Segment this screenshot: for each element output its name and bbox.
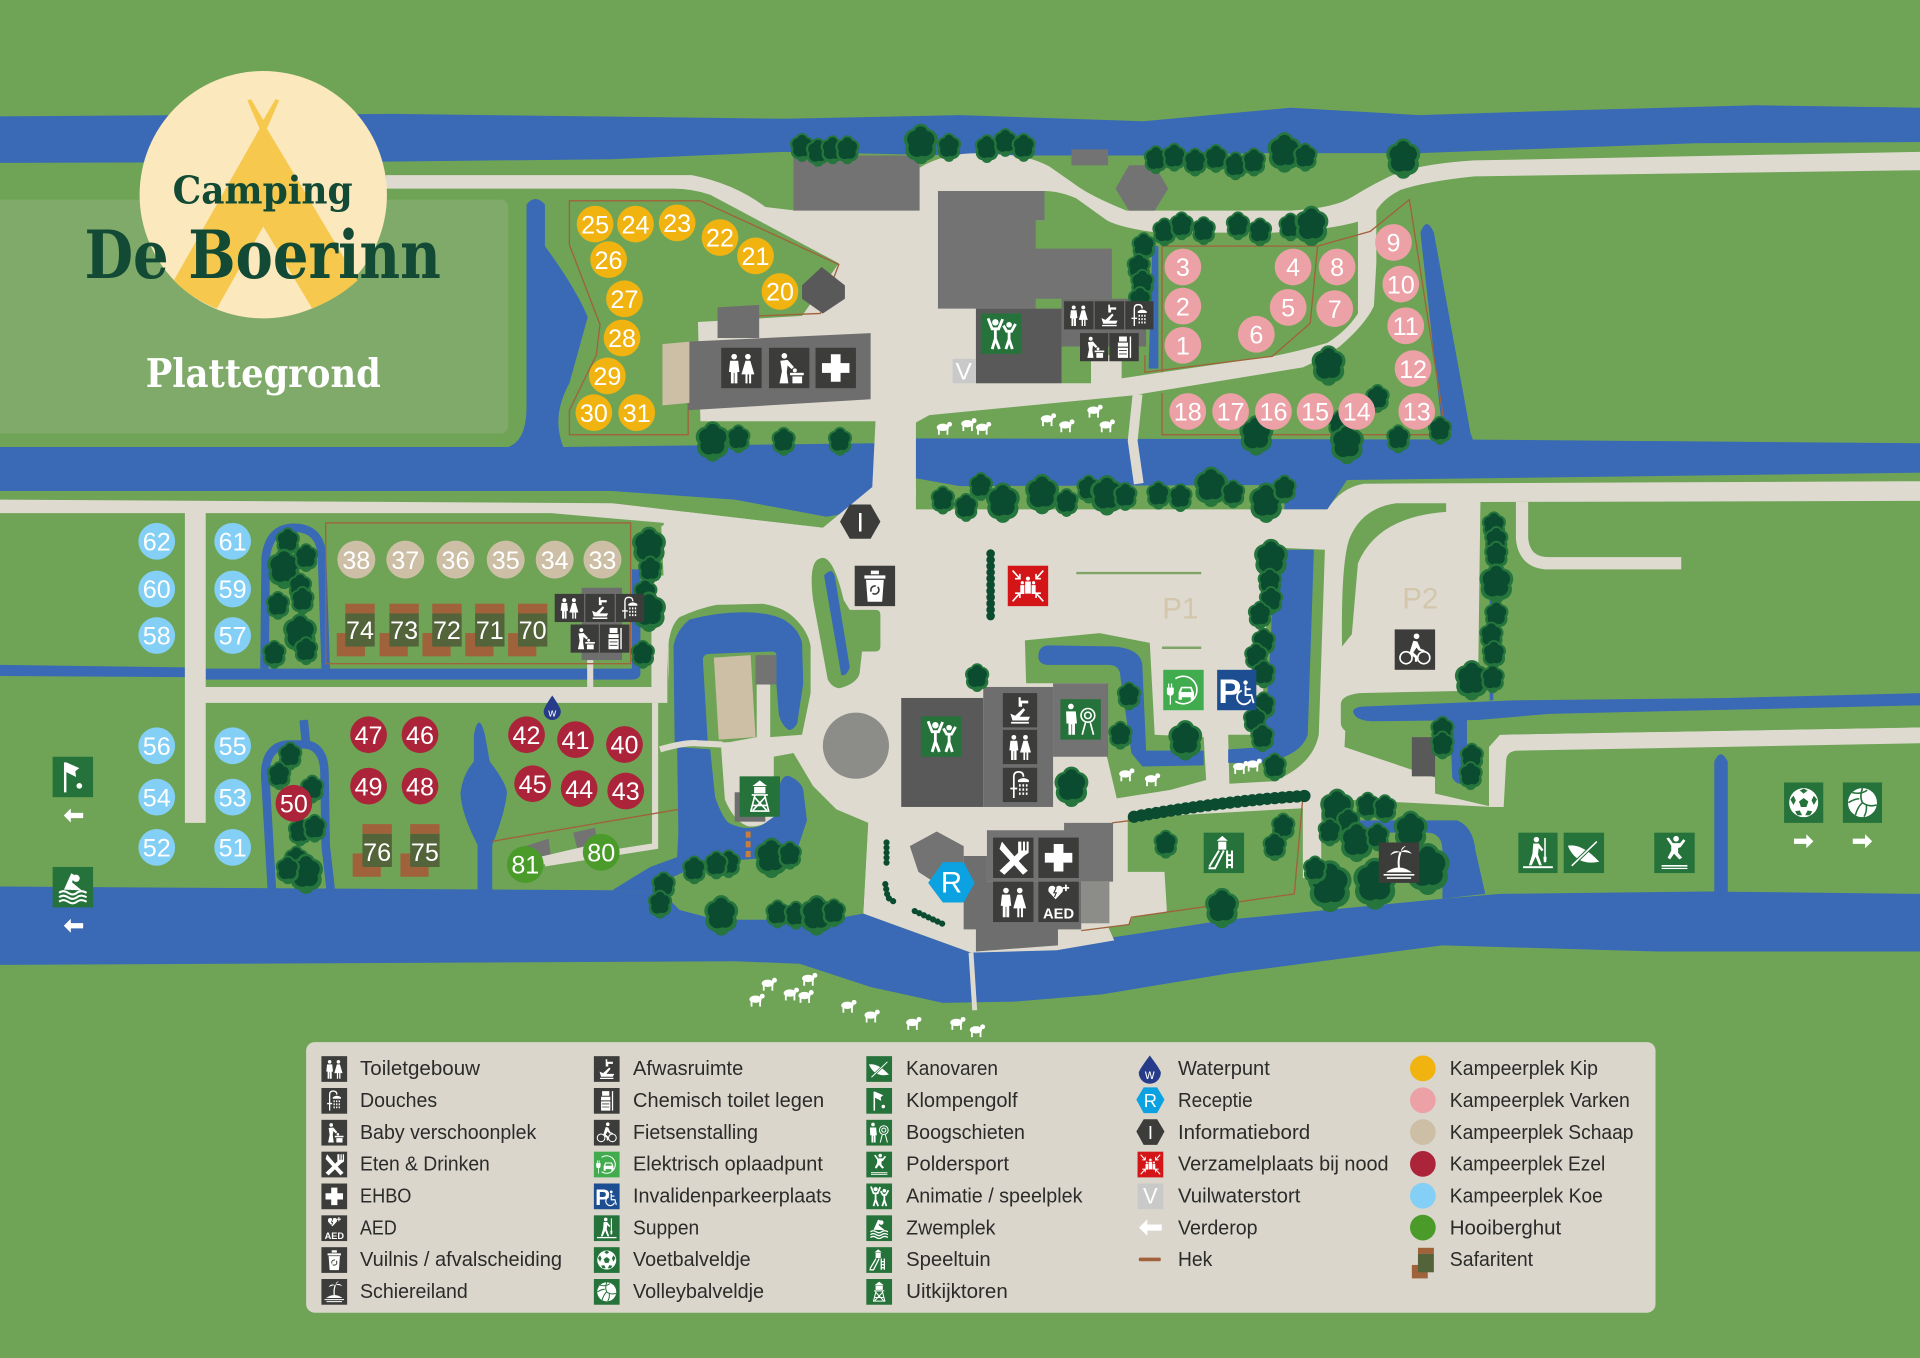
legend column 3 — [866, 1056, 1083, 1305]
tent 72 — [422, 604, 462, 656]
Informatiebord — [1136, 1119, 1310, 1145]
Verzamelplaats bij nood: Verzamelplaats bij nood — [1178, 1154, 1389, 1176]
pitch 61: 61 — [219, 528, 247, 556]
icon: archery — [1060, 699, 1101, 740]
pitch 38 — [337, 541, 375, 579]
Kampeerplek Ezel — [1410, 1151, 1605, 1177]
heading: Plattegrond: Plattegrond — [146, 351, 381, 397]
pitch 80: 80 — [587, 839, 615, 867]
icon: SUP — [1518, 833, 1558, 873]
pitch 53 — [214, 779, 251, 816]
Zwemplek: Zwemplek — [906, 1217, 996, 1239]
pitch 22 — [702, 219, 738, 256]
pitch 22: 22 — [706, 225, 734, 253]
Waterpunt: Waterpunt — [1178, 1058, 1270, 1080]
Kampeerplek Schaap: Kampeerplek Schaap — [1450, 1122, 1633, 1144]
icon: shower Schaap — [616, 594, 644, 622]
pitch 54: 54 — [143, 784, 171, 812]
pitch 36 — [437, 541, 474, 579]
Voetbalveldje — [594, 1247, 751, 1273]
pitch 49 — [350, 768, 387, 805]
icon: assembly point — [1008, 566, 1048, 606]
Kanovaren: Kanovaren — [906, 1058, 998, 1080]
pitch 55: 55 — [219, 733, 247, 761]
icon: vuilwaterstort: V — [956, 359, 973, 386]
pitch 4 — [1275, 249, 1311, 285]
pitch 25 — [577, 206, 613, 242]
tent 72: 72 — [433, 617, 461, 645]
pitch 3: 3 — [1176, 254, 1190, 282]
icon: klompengolf — [53, 757, 93, 797]
AED — [321, 1215, 397, 1241]
Suppen: Suppen — [633, 1217, 699, 1239]
pitch 5: 5 — [1281, 295, 1295, 323]
pitch 14: 14 — [1343, 399, 1371, 427]
pitch 34 — [536, 541, 574, 579]
pitch 60 — [138, 571, 175, 607]
Kampeerplek Ezel: Kampeerplek Ezel — [1450, 1154, 1605, 1176]
Verderop — [1139, 1217, 1258, 1239]
icon: baby Schaap — [571, 625, 599, 653]
arrow: volleyball onward — [1853, 834, 1872, 848]
icon: toilets central — [1003, 730, 1037, 764]
Receptie: R — [1144, 1090, 1157, 1111]
pitch 58: 58 — [143, 623, 171, 651]
pitch 26 — [590, 241, 627, 278]
green islands and banks — [664, 503, 1920, 922]
pitch 51: 51 — [219, 835, 247, 863]
pitch 15: 15 — [1301, 399, 1329, 427]
Fietsenstalling — [594, 1120, 758, 1146]
pitch 30 — [576, 394, 612, 431]
pitch 33 — [583, 541, 621, 579]
icon: information board: I — [856, 507, 864, 537]
pitch 14 — [1338, 393, 1375, 430]
icon: reception — [928, 862, 975, 902]
Suppen — [594, 1215, 699, 1241]
Toiletgebouw — [321, 1056, 480, 1082]
pitch 28 — [604, 320, 640, 356]
tent 74: 74 — [346, 617, 374, 645]
pitch 20 — [762, 273, 798, 310]
pitch 10: 10 — [1387, 271, 1415, 299]
pitch 23: 23 — [663, 210, 691, 238]
pitch 1 — [1164, 327, 1201, 364]
pitch 21: 21 — [742, 243, 769, 271]
inner ponds and channels — [590, 519, 1920, 894]
pitch 49: 49 — [355, 773, 383, 801]
pitch 16: 16 — [1260, 399, 1287, 427]
Elektrisch oplaadpunt: Elektrisch oplaadpunt — [633, 1154, 823, 1176]
pitch 3 — [1164, 249, 1201, 285]
icon: water point: w — [547, 707, 556, 719]
Animatie / speelplek — [866, 1184, 1083, 1209]
roads and plaza — [0, 152, 1920, 1010]
Speeltuin — [866, 1247, 991, 1273]
pitches: Varken — [1164, 224, 1435, 430]
pitch 57: 57 — [219, 623, 247, 651]
icon: waste — [855, 566, 895, 606]
pitch 12 — [1395, 350, 1431, 387]
EHBO — [321, 1184, 411, 1209]
icon: dishes Schaap — [585, 594, 615, 622]
icon: baby north — [1080, 333, 1108, 361]
tent 76 — [353, 824, 392, 877]
pitch 41 — [557, 721, 594, 758]
Volleybalveldje: Volleybalveldje — [633, 1281, 764, 1303]
Schiereiland: Schiereiland — [360, 1281, 468, 1303]
Waterpunt — [1139, 1056, 1270, 1084]
tent 73: 73 — [390, 617, 418, 645]
pitch 2 — [1164, 288, 1201, 324]
tent 70: 70 — [519, 617, 547, 645]
icon: animation north — [981, 313, 1021, 354]
legend column 1 — [321, 1056, 562, 1305]
pitch 40 — [606, 726, 643, 763]
Vuilwaterstort — [1138, 1184, 1301, 1209]
pitch 35 — [487, 541, 525, 579]
Klompengolf — [866, 1088, 1018, 1114]
Verderop: Verderop — [1178, 1217, 1258, 1239]
logo: Camping De Boerinn: Camping — [173, 167, 353, 212]
pitch 43 — [607, 773, 644, 809]
pitch 38: 38 — [342, 547, 370, 575]
icon: polder sport — [1654, 833, 1695, 873]
pitch 58 — [138, 617, 175, 654]
pitch 12: 12 — [1399, 356, 1427, 384]
tent 75 — [400, 824, 440, 877]
pitch 33: 33 — [588, 547, 616, 575]
icon: first aid west — [816, 348, 856, 388]
pitch 8 — [1319, 249, 1356, 285]
pitch 24: 24 — [622, 211, 650, 239]
legend panel — [306, 1042, 1656, 1313]
Safaritent: Safaritent — [1450, 1249, 1533, 1271]
icon: chemical toilet Schaap — [600, 625, 629, 653]
pitch 52 — [138, 829, 175, 866]
Kanovaren — [866, 1056, 998, 1082]
pitch 61 — [214, 523, 251, 560]
pitch 7: 7 — [1328, 296, 1342, 324]
Kampeerplek Koe: Kampeerplek Koe — [1450, 1185, 1603, 1207]
pitch 6: 6 — [1249, 321, 1263, 349]
pitch 29 — [589, 358, 626, 394]
pitch 42 — [508, 716, 545, 753]
Hek: Hek — [1178, 1249, 1213, 1271]
icon: reception: R — [941, 867, 962, 900]
pitch 16 — [1255, 393, 1292, 430]
icon: EV charging — [1163, 670, 1204, 710]
pitch 9: 9 — [1386, 230, 1400, 258]
fences — [326, 200, 1444, 931]
logo: Camping De Boerinn — [84, 71, 441, 318]
pitch 54 — [138, 779, 175, 816]
icon: dishes central — [1003, 693, 1037, 727]
Kampeerplek Kip: Kampeerplek Kip — [1450, 1058, 1598, 1080]
pitches: Kip — [576, 204, 798, 431]
grazing animals — [749, 405, 1262, 1037]
pitches: Schaap — [337, 541, 621, 579]
tent 73 — [380, 604, 419, 656]
Waterpunt: w — [1144, 1067, 1155, 1082]
pitch 46 — [402, 716, 438, 753]
icon: toilets Schaap — [555, 594, 584, 622]
icon: toilets south — [993, 882, 1033, 922]
icon: peninsula — [1379, 842, 1419, 883]
pitch 5 — [1270, 289, 1307, 326]
Poldersport: Poldersport — [906, 1154, 1009, 1176]
Douches: Douches — [360, 1090, 437, 1112]
icon: dishes north — [1095, 301, 1124, 329]
Uitkijktoren — [866, 1279, 1008, 1305]
arrow: golf onward — [64, 808, 83, 823]
icon: chemical toilet north — [1109, 333, 1139, 361]
pitch 57 — [214, 617, 251, 654]
pitch 45 — [514, 765, 551, 802]
pitch 24 — [617, 206, 654, 242]
tent 76: 76 — [363, 839, 391, 867]
safari tents — [337, 604, 547, 877]
icon: lookout tower — [740, 776, 780, 817]
pitch 10 — [1382, 266, 1419, 302]
icon: swimming — [53, 867, 93, 907]
AED: AED — [360, 1217, 397, 1239]
pitch 62 — [138, 523, 175, 560]
pitch 29: 29 — [593, 363, 621, 391]
Vuilnis / afvalscheiding: Vuilnis / afvalscheiding — [360, 1249, 562, 1271]
icon: shower central — [1003, 768, 1037, 802]
pitch 48: 48 — [406, 773, 434, 801]
icon: AED — [1038, 882, 1079, 922]
Kampeerplek Schaap — [1410, 1119, 1633, 1145]
Kampeerplek Varken — [1410, 1087, 1630, 1113]
legend column 5 — [1410, 1056, 1633, 1278]
Douches — [321, 1088, 437, 1114]
pitch 48 — [402, 768, 438, 805]
arrow: football onward — [1794, 834, 1813, 848]
legend column 4 — [1136, 1056, 1389, 1271]
Hooiberghut — [1410, 1215, 1562, 1240]
pitches: Koe — [138, 523, 251, 866]
tent 75: 75 — [411, 839, 439, 867]
pitch 55 — [214, 727, 251, 764]
icon: playground — [1204, 833, 1244, 873]
hedges — [885, 553, 1305, 925]
Kampeerplek Koe — [1410, 1183, 1603, 1209]
Receptie — [1136, 1087, 1253, 1113]
pitch 47: 47 — [355, 722, 383, 750]
buildings — [582, 149, 1435, 951]
pitch 9 — [1375, 224, 1412, 261]
icon: restaurant — [993, 838, 1033, 878]
Hek — [1139, 1249, 1213, 1271]
pitches: Ezel — [276, 716, 644, 822]
Eten & Drinken: Eten & Drinken — [360, 1154, 490, 1176]
pitch 20: 20 — [766, 279, 794, 307]
icon: water point — [544, 696, 561, 720]
pitch 42: 42 — [513, 722, 540, 750]
pitch 43: 43 — [612, 778, 640, 806]
pitch 50: 50 — [280, 790, 308, 818]
Eten & Drinken — [321, 1152, 490, 1177]
pitch 56: 56 — [143, 733, 171, 761]
icon: disabled parking — [1217, 670, 1256, 711]
label: P2: P2 — [1402, 583, 1438, 616]
pitch 60: 60 — [143, 576, 171, 604]
Vuilwaterstort: Vuilwaterstort — [1178, 1185, 1301, 1207]
pitch 81: 81 — [511, 852, 539, 880]
Volleybalveldje — [594, 1279, 764, 1305]
pitch 23 — [659, 204, 696, 241]
pitch 25: 25 — [581, 211, 609, 239]
pitch 30: 30 — [580, 400, 608, 428]
legend — [306, 1042, 1656, 1313]
pitch 15 — [1297, 393, 1333, 430]
pitch 52: 52 — [143, 835, 171, 863]
Receptie: Receptie — [1178, 1090, 1253, 1112]
pitch 47 — [350, 716, 387, 753]
Safaritent — [1412, 1248, 1533, 1278]
pitch 41: 41 — [562, 727, 589, 755]
pitch 17: 17 — [1217, 399, 1245, 427]
icon: volleyball — [1843, 782, 1882, 823]
pitch 31 — [618, 394, 655, 431]
Animatie / speelplek: Animatie / speelplek — [906, 1185, 1083, 1207]
pitch 37 — [386, 541, 424, 579]
AED: AED — [325, 1231, 344, 1241]
Baby verschoonplek: Baby verschoonplek — [360, 1122, 537, 1144]
pitch 44 — [561, 770, 598, 807]
Klompengolf: Klompengolf — [906, 1090, 1018, 1112]
pitch 1: 1 — [1176, 333, 1190, 361]
Voetbalveldje: Voetbalveldje — [633, 1249, 751, 1271]
pitch 40: 40 — [611, 732, 638, 760]
icon: bike storage — [1395, 629, 1435, 670]
Informatiebord: I — [1148, 1122, 1153, 1143]
pitch 27 — [606, 280, 643, 317]
pitch 28: 28 — [608, 325, 636, 353]
lighter title panel — [0, 200, 508, 433]
pitch 27: 27 — [611, 286, 638, 314]
pitch 36: 36 — [442, 547, 469, 575]
Hooiberghut: Hooiberghut — [1450, 1217, 1562, 1239]
Zwemplek — [866, 1215, 996, 1241]
icon: information board — [840, 505, 880, 539]
pitch 44: 44 — [565, 776, 593, 804]
icon: football — [1784, 782, 1823, 823]
map icons — [53, 301, 1882, 933]
Boogschieten: Boogschieten — [906, 1122, 1025, 1144]
label: P1: P1 — [1162, 592, 1198, 625]
Afwasruimte — [594, 1056, 743, 1082]
EHBO: EHBO — [360, 1185, 411, 1207]
pitch 7 — [1316, 290, 1353, 327]
trees — [262, 124, 1513, 936]
Baby verschoonplek — [321, 1120, 537, 1146]
tent 70 — [508, 604, 547, 656]
pitch 31: 31 — [623, 400, 651, 428]
icon: shower north — [1125, 301, 1153, 329]
Informatiebord: Informatiebord — [1178, 1122, 1310, 1144]
pitch 59: 59 — [219, 576, 247, 604]
pitch 21 — [737, 238, 774, 274]
legend column 2 — [594, 1056, 831, 1305]
Fietsenstalling: Fietsenstalling — [633, 1122, 758, 1144]
Toiletgebouw: Toiletgebouw — [360, 1058, 480, 1080]
icon: baby west — [769, 348, 809, 388]
Poldersport — [866, 1152, 1009, 1177]
pitch 13 — [1398, 393, 1435, 430]
pitch 11 — [1387, 307, 1424, 344]
pitch 62: 62 — [143, 528, 171, 556]
pitch 37: 37 — [391, 547, 419, 575]
icon: first aid central — [1038, 838, 1079, 878]
icon: disabled parking: P — [1218, 673, 1241, 711]
tent 71: 71 — [476, 617, 504, 645]
Speeltuin: Speeltuin — [906, 1249, 991, 1271]
Vuilwaterstort: V — [1143, 1184, 1158, 1209]
pitch 8: 8 — [1330, 254, 1344, 282]
pitch 51 — [214, 829, 251, 866]
Kampeerplek Kip — [1410, 1056, 1598, 1081]
Chemisch toilet legen: Chemisch toilet legen — [633, 1090, 824, 1112]
icon: canoe — [1564, 833, 1604, 873]
icon: toilets north — [1064, 301, 1093, 329]
icon: animation central — [921, 716, 961, 757]
pitch 35: 35 — [492, 547, 520, 575]
pitch 18 — [1169, 393, 1206, 430]
pitch 13: 13 — [1403, 399, 1431, 427]
Boogschieten — [866, 1120, 1025, 1146]
pitch 34: 34 — [541, 547, 569, 575]
Uitkijktoren: Uitkijktoren — [906, 1281, 1008, 1303]
icon: AED: AED — [1043, 906, 1074, 922]
icon: toilets west — [721, 348, 762, 388]
pitch 2: 2 — [1176, 293, 1190, 321]
pitch 17 — [1212, 393, 1249, 430]
Invalidenparkeerplaats: P — [595, 1185, 610, 1210]
pitch 56 — [138, 727, 175, 764]
hay huts — [507, 828, 620, 883]
Kampeerplek Varken: Kampeerplek Varken — [1450, 1090, 1630, 1112]
Afwasruimte: Afwasruimte — [633, 1058, 743, 1080]
arrow: swim onward — [64, 919, 83, 933]
pitch 6 — [1238, 316, 1275, 353]
pitch 53: 53 — [219, 784, 247, 812]
pitch 11: 11 — [1393, 313, 1419, 341]
pitch 18: 18 — [1174, 399, 1202, 427]
pitch 46: 46 — [406, 722, 434, 750]
waterways — [0, 105, 1920, 1003]
Schiereiland — [321, 1279, 468, 1305]
Invalidenparkeerplaats: Invalidenparkeerplaats — [633, 1185, 831, 1207]
Invalidenparkeerplaats — [594, 1184, 831, 1210]
pitch 59 — [214, 571, 251, 607]
pitch 4: 4 — [1286, 254, 1300, 282]
tent 71 — [465, 604, 504, 656]
pitch 26: 26 — [595, 247, 623, 275]
pitch 45: 45 — [519, 771, 547, 799]
logo: Camping De Boerinn: De Boerinn — [84, 216, 441, 294]
tent 74 — [337, 604, 375, 656]
pitch 50 — [276, 785, 312, 822]
